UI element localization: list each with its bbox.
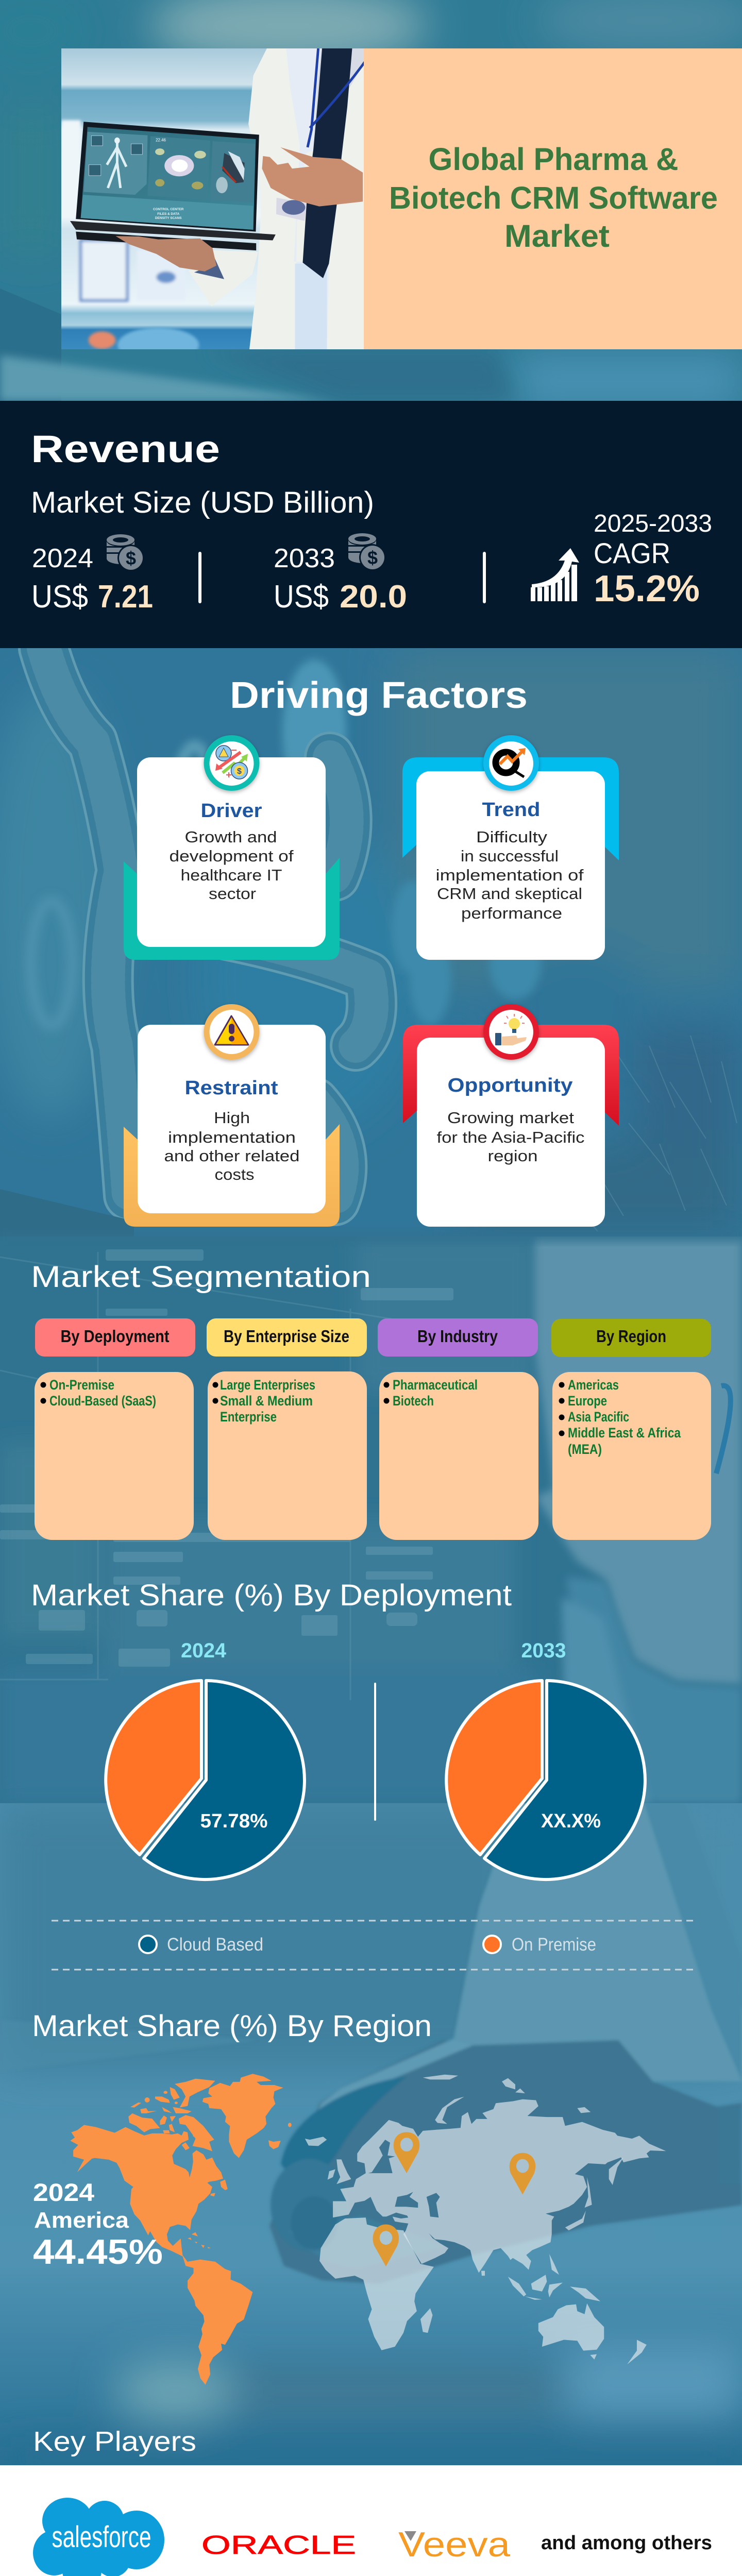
raised hand <box>262 147 363 207</box>
stat: 2024: 7.21 <box>98 579 153 615</box>
icon: driver <box>204 735 260 791</box>
section: driving factors <box>124 675 619 1227</box>
text: restraint body: costs <box>214 1165 255 1183</box>
text: opportunity body: Growing market <box>447 1109 574 1127</box>
card: restraint <box>124 1004 340 1227</box>
segment: by deployment: By Deployment <box>61 1327 170 1346</box>
chromosome <box>44 648 372 1200</box>
shirt <box>286 48 329 349</box>
icon: driver: $ <box>237 767 242 776</box>
text: driver body <box>169 828 294 903</box>
holding hand <box>115 236 216 272</box>
segment: by industry <box>378 1318 538 1540</box>
panel: key players logos <box>0 2465 742 2576</box>
heading: market share by region: Market Share (%) By Region <box>32 2009 432 2043</box>
stat: 2033: US$ <box>274 579 329 615</box>
logo: salesforce: salesforce <box>52 2520 151 2554</box>
background: hand and car photo <box>0 1803 742 2473</box>
stat: cagr: 2025-2033 <box>594 510 712 537</box>
icon: trend <box>483 735 539 791</box>
icon: opportunity <box>483 1004 539 1060</box>
stat: 2033: 2033 <box>274 544 335 573</box>
segment: by enterprise size: Enterprise <box>220 1409 277 1425</box>
text: opportunity body: region <box>487 1147 538 1165</box>
callout: america share: 44.45% <box>33 2232 163 2272</box>
text: trend body <box>436 828 584 922</box>
card: trend <box>402 735 619 960</box>
stat: 2033: 20.0 <box>340 579 407 615</box>
stat: 2024: 2024 <box>32 544 93 573</box>
background: top blurred photo <box>0 0 742 407</box>
hair texture <box>567 1036 737 1231</box>
stat: 2024 <box>31 544 153 615</box>
text: trend body: Difficulty <box>476 828 548 846</box>
segment: by region: Americas <box>568 1377 619 1393</box>
icon: map pins <box>373 2132 535 2266</box>
lab coat <box>248 48 365 349</box>
segment: by region: (MEA) <box>568 1442 602 1457</box>
text: restraint body: and other related <box>164 1147 300 1165</box>
subheading: market size: Market Size (USD Billion) <box>31 486 374 519</box>
map: americas highlighted <box>70 2074 292 2385</box>
photo backdrop <box>61 48 267 349</box>
text: trend body: performance <box>461 904 562 922</box>
label: opportunity: Opportunity <box>447 1075 573 1096</box>
logo: oracle: ORACLE <box>201 2530 356 2560</box>
map: rest of world <box>305 2075 666 2364</box>
stat: 2033 <box>274 544 407 615</box>
title text: Global Pharma & <box>429 142 678 177</box>
title panel <box>364 48 742 349</box>
callout: america share: America <box>34 2208 129 2233</box>
segment: by region <box>551 1319 711 1540</box>
section: segmentation columns <box>35 1318 711 1540</box>
pie chart: 2033: 2033 <box>521 1639 566 1662</box>
icon: coins 2024: $ <box>126 548 136 569</box>
text: restraint body: High <box>214 1109 250 1127</box>
label: driver: Driver <box>201 800 262 822</box>
text: driver body: sector <box>209 885 256 903</box>
background: chromosome and monitors photo <box>0 648 742 1236</box>
segment: by deployment: On-Premise <box>49 1377 114 1393</box>
callout: america share <box>33 2179 163 2272</box>
segment: by enterprise size: Small & Medium <box>220 1393 313 1409</box>
text: trend body: in successful <box>461 847 559 865</box>
text: and among others: and among others <box>541 2532 712 2554</box>
text: opportunity body: for the Asia-Pacific <box>437 1128 584 1146</box>
icon: coins 2033 <box>348 533 386 571</box>
badge <box>276 198 307 221</box>
label: restraint: Restraint <box>184 1077 278 1099</box>
laptop: CONTROL CENTER <box>153 208 184 211</box>
stat: cagr: 15.2% <box>594 568 700 609</box>
icon: coins 2024 <box>107 534 144 571</box>
pie chart: 2024 <box>106 1639 305 1879</box>
laptop: 22.46 <box>156 138 166 143</box>
icon: restraint <box>204 1004 260 1060</box>
revenue band <box>0 401 742 648</box>
stat: 2024: US$ <box>31 579 88 615</box>
callout: america share: 2024 <box>33 2179 94 2207</box>
title text: Biotech CRM Software <box>389 180 718 215</box>
segment: by industry: By Industry <box>417 1327 498 1346</box>
legend: deployment <box>52 1921 695 1970</box>
arm sleeve <box>188 250 258 306</box>
heading: driving factors: Driving Factors <box>230 675 528 716</box>
label: trend: Trend <box>482 799 540 821</box>
pie chart: 2024: 57.78% <box>200 1810 268 1832</box>
text: driver body: healthcare IT <box>180 866 282 884</box>
heading: key players: Key Players <box>33 2426 196 2457</box>
text: restraint body: implementation <box>168 1128 296 1146</box>
background: monitors and face photo <box>0 1236 742 1803</box>
text: trend body: CRM and skeptical <box>437 885 582 903</box>
pie chart: 2024: 2024 <box>181 1639 227 1662</box>
legend: deployment: Cloud Based <box>167 1935 263 1955</box>
segment: by region: Asia Pacific <box>568 1409 629 1425</box>
segment: by enterprise size <box>207 1318 367 1540</box>
segment: by enterprise size: Large Enterprises <box>220 1377 315 1393</box>
heading: market segmentation: Market Segmentation <box>31 1260 371 1294</box>
segment: by region: By Region <box>596 1327 666 1346</box>
text: driver body: development of <box>169 847 294 865</box>
segment: by region: Europe <box>568 1393 607 1409</box>
segment: by deployment <box>35 1318 195 1540</box>
text: trend body: implementation of <box>436 866 584 884</box>
stat: cagr <box>594 510 712 609</box>
legend: deployment: On Premise <box>512 1935 596 1955</box>
icon: coins 2033: $ <box>367 547 378 568</box>
logo: salesforce <box>33 2498 164 2576</box>
text: driver body: Growth and <box>184 828 277 846</box>
lanyard <box>308 48 365 147</box>
text: restraint body <box>164 1109 300 1183</box>
pie chart: 2033: XX.X% <box>541 1810 601 1832</box>
segment: by enterprise size: By Enterprise Size <box>224 1327 349 1346</box>
segment: by deployment: Cloud-Based (SaaS) <box>49 1393 156 1409</box>
tie <box>302 48 352 278</box>
segment: by industry: Biotech <box>393 1393 434 1409</box>
laptop <box>70 122 276 250</box>
heading: revenue: Revenue <box>31 428 220 470</box>
icon: growth chart <box>531 548 579 601</box>
text: opportunity body <box>437 1109 584 1165</box>
title text <box>389 142 718 253</box>
segment: by region: Middle East & Africa <box>568 1425 681 1440</box>
card: opportunity <box>403 1004 619 1227</box>
title text: Market <box>504 218 610 253</box>
laptop: FILES & DATA <box>157 212 180 216</box>
laptop: DENSITY SCANS <box>155 216 182 220</box>
logo: veeva: Veeva <box>398 2525 510 2564</box>
stat: cagr: CAGR <box>594 537 670 569</box>
pie chart: 2033 <box>446 1639 645 1879</box>
segment: by industry: Pharmaceutical <box>393 1377 478 1393</box>
card: driver <box>124 735 340 960</box>
heading: market share by deployment: Market Share (%) By Deployment <box>31 1579 512 1612</box>
hero image: doctor holding laptop <box>61 48 365 363</box>
